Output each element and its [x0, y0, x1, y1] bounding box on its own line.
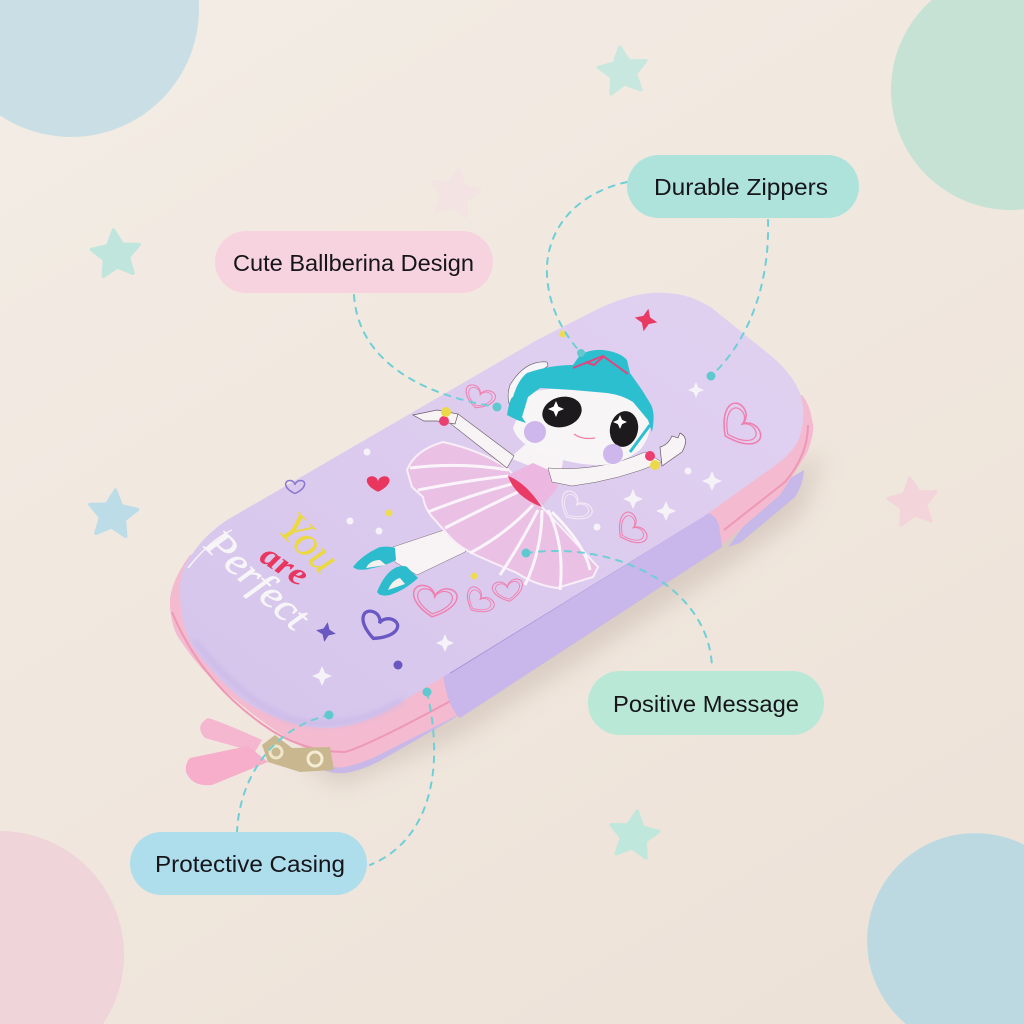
left arm [451, 414, 514, 468]
head [513, 388, 650, 465]
label: Positive Message [588, 671, 824, 735]
hair strand [630, 425, 650, 452]
slogan: You are Perfect [188, 502, 350, 639]
dots [346, 448, 692, 534]
case shadow [300, 450, 825, 785]
wing [508, 362, 548, 412]
lower shell right [728, 470, 804, 547]
left hand [413, 410, 458, 424]
label: Protective Casing: Protective Casing [155, 851, 345, 877]
label: Positive Message: Positive Message [613, 691, 799, 717]
ballerina illustration [353, 350, 686, 596]
surface decorations [286, 306, 764, 686]
zipper stitching [172, 425, 808, 752]
label: Cute Ballberina Design [215, 231, 493, 293]
hair [507, 350, 654, 432]
top face [180, 293, 804, 728]
front edge highlight [194, 640, 402, 723]
connector: Positive Message [526, 551, 712, 668]
dashed connectors [237, 182, 768, 865]
mouth [574, 434, 595, 438]
right bracelet [645, 451, 660, 470]
zipper pull [186, 718, 334, 785]
connector: Cute Ballberina Design [354, 295, 497, 407]
connector: Protective Casing to zipper [237, 715, 330, 832]
right hand [660, 433, 686, 466]
label: Durable Zippers [627, 155, 859, 218]
decorative circle: bottom right [867, 833, 1024, 1024]
slogan: You are Perfect: are [254, 536, 316, 593]
outline hearts [411, 383, 764, 620]
right eye [607, 408, 641, 450]
shoe: lower [377, 566, 418, 596]
legs [393, 527, 470, 575]
pencil case [170, 293, 825, 785]
label: Durable Zippers: Durable Zippers [654, 174, 828, 200]
chest [510, 440, 565, 478]
tiara [573, 356, 628, 374]
hinge seam [450, 518, 700, 673]
hinge strip [443, 513, 722, 718]
label: Protective Casing [130, 832, 367, 895]
connector: Durable Zippers to case [711, 220, 768, 376]
label: Cute Ballberina Design: Cute Ballberina Design [233, 250, 474, 276]
slogan: You are Perfect: Perfect [196, 520, 320, 639]
cheeks [524, 421, 623, 464]
decorative circle: top left [0, 0, 199, 137]
zipper band [170, 395, 813, 768]
left bracelet [439, 407, 451, 426]
stars [632, 306, 660, 334]
connector end dots [324, 349, 716, 720]
decorative stars [87, 44, 940, 859]
decorative circle: bottom left [0, 831, 124, 1024]
filled hearts [367, 476, 390, 492]
left eye [539, 392, 585, 432]
shoe: upper [353, 547, 396, 570]
lower shell [300, 700, 458, 773]
waist ribbon [508, 476, 542, 507]
decorative circle: top right [891, 0, 1024, 210]
connector: Durable Zippers to hair [547, 182, 627, 353]
right arm [548, 452, 662, 486]
tutu [407, 442, 598, 588]
slogan: You are Perfect: You [269, 502, 350, 583]
connector: Protective Casing to casing [370, 692, 434, 865]
bodice [508, 463, 558, 505]
tutu pleats [410, 465, 590, 590]
